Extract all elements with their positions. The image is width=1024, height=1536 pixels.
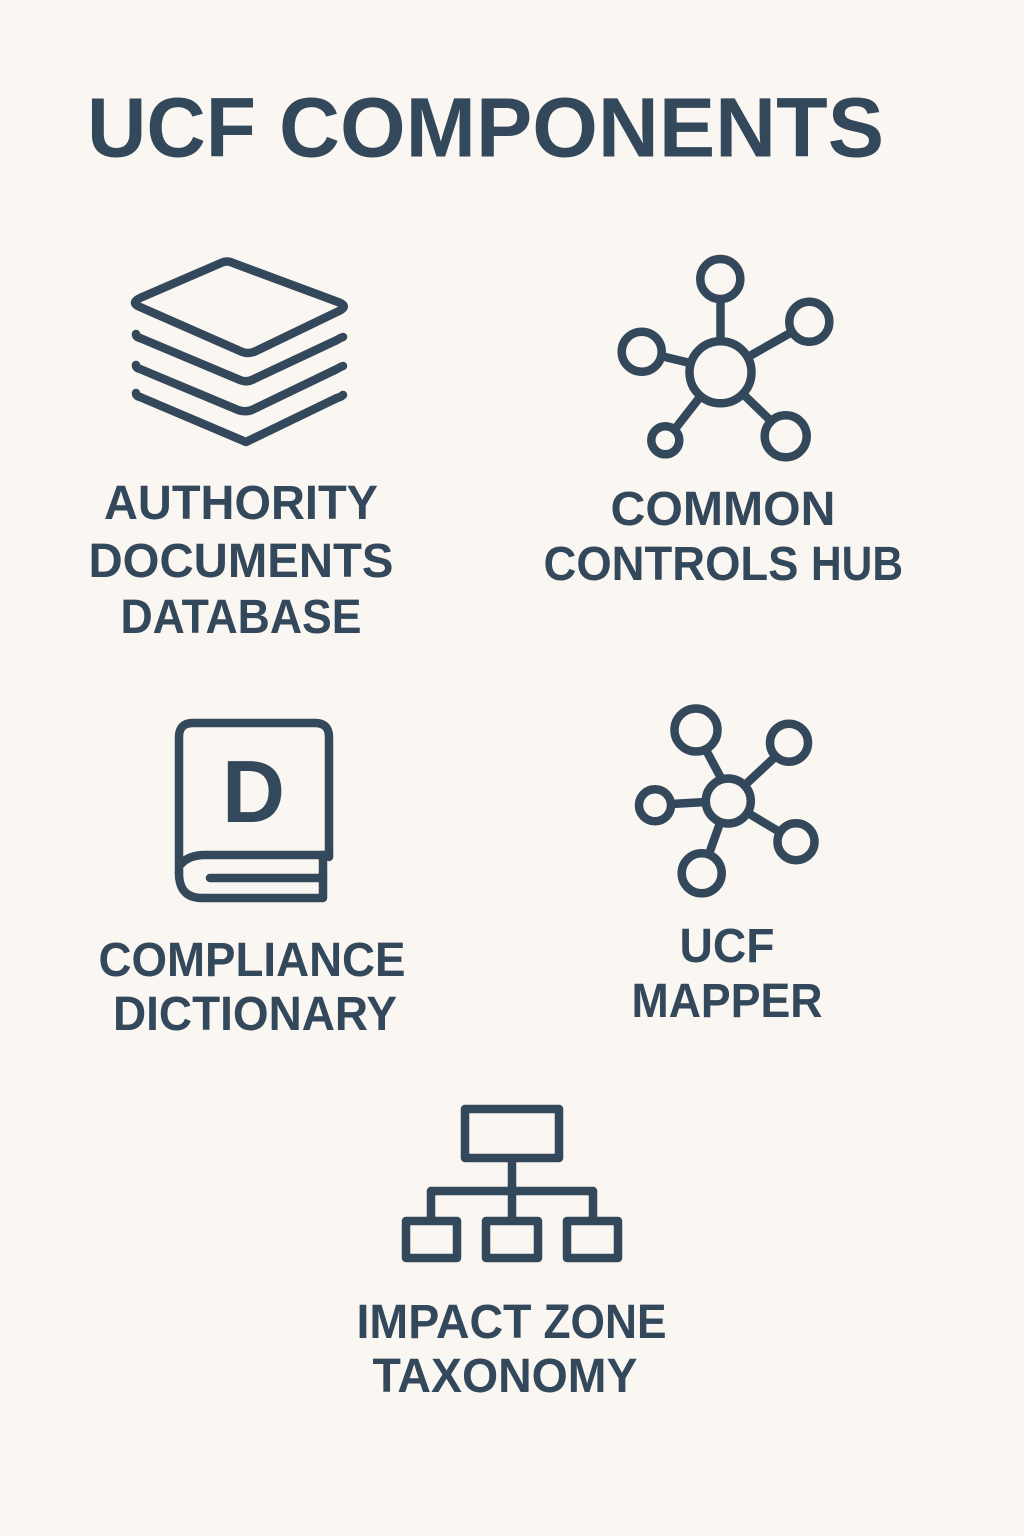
icon: dictionary book bbox=[179, 723, 329, 898]
label: ucf mapper: MAPPER bbox=[632, 975, 822, 1028]
label: authority documents database: AUTHORITY bbox=[104, 477, 378, 530]
label: common controls hub: HUB bbox=[811, 538, 903, 591]
label: compliance dictionary bbox=[98, 934, 406, 1041]
label: impact zone taxonomy bbox=[356, 1296, 666, 1403]
label: compliance dictionary: COMPLIANCE bbox=[98, 934, 406, 987]
icon: ucf mapper network bbox=[639, 708, 814, 893]
label: ucf mapper: UCF bbox=[680, 920, 774, 973]
title: UCF bbox=[87, 80, 256, 174]
label: authority documents database: DATABASE bbox=[120, 591, 362, 644]
label: compliance dictionary: DICTIONARY bbox=[113, 988, 397, 1041]
icon: dictionary book: D bbox=[222, 742, 285, 841]
label: ucf mapper bbox=[632, 920, 822, 1028]
label: common controls hub bbox=[544, 483, 903, 591]
icon: hierarchy chart bbox=[406, 1109, 618, 1258]
title: COMPONENTS bbox=[279, 80, 884, 174]
label: authority documents database bbox=[88, 477, 394, 644]
label: common controls hub: CONTROLS bbox=[544, 538, 798, 591]
label: impact zone taxonomy: IMPACT bbox=[356, 1296, 532, 1349]
icon: common controls hub bbox=[622, 259, 829, 457]
label: authority documents database: DOCUMENTS bbox=[88, 535, 394, 588]
label: common controls hub: COMMON bbox=[610, 483, 836, 536]
label: impact zone taxonomy: ZONE bbox=[544, 1296, 666, 1349]
label: impact zone taxonomy: TAXONOMY bbox=[372, 1350, 638, 1403]
icon: stacked layers bbox=[135, 262, 344, 442]
